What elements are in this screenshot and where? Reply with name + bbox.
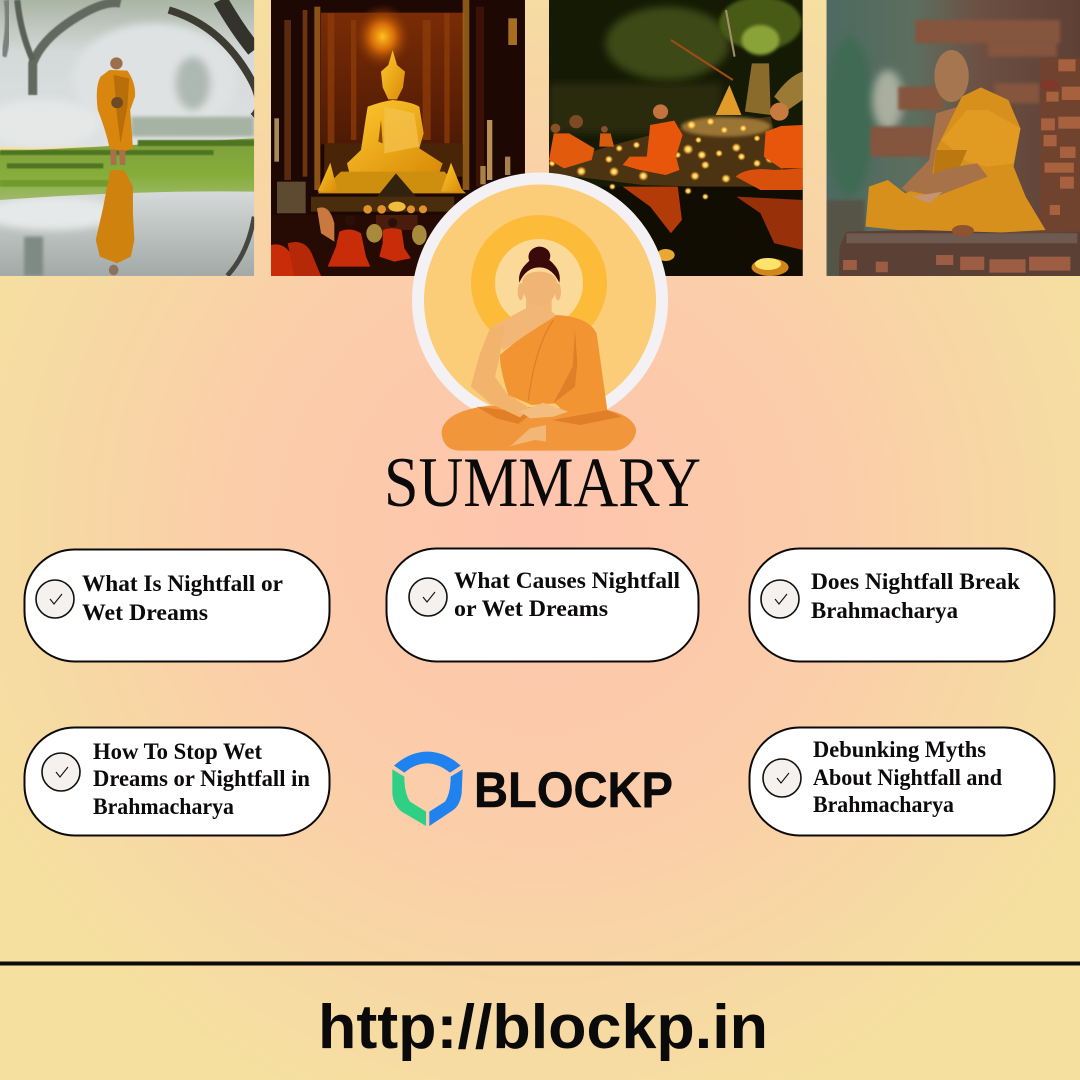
- card text: Wet Dreams: [82, 600, 208, 625]
- tree trunks and branches: [3, 0, 259, 276]
- card text: What Causes Nightfall: [454, 568, 680, 593]
- logo: BLOCKP: [392, 752, 673, 826]
- floating candle: [751, 259, 789, 276]
- footer url: http://blockp.in: [318, 993, 768, 1062]
- brick column: [1040, 58, 1080, 232]
- logo wordmark: BLOCKP: [474, 762, 673, 818]
- logo shield icon: [392, 752, 463, 826]
- card text: Does Nightfall Break: [811, 569, 1020, 594]
- card text: About Nightfall and: [813, 765, 1002, 790]
- card text: Dreams or Nightfall in: [93, 766, 310, 791]
- card: what causes nightfall: [386, 548, 698, 662]
- halo circles: [412, 172, 668, 428]
- tree foliage: [605, 7, 729, 80]
- candlelit ground: [549, 116, 784, 187]
- card: debunking myths: [750, 728, 1054, 836]
- Buddha statue: [318, 50, 466, 193]
- kneeling monks: [271, 228, 411, 276]
- card text: Brahmacharya: [93, 794, 234, 819]
- card text: What Is Nightfall or: [82, 571, 283, 596]
- card text: Brahmacharya: [811, 598, 958, 623]
- head and hair: [518, 247, 561, 306]
- check icon: [36, 580, 74, 618]
- monk and reflection: [110, 57, 123, 69]
- card: does nightfall break brahmacharya: [750, 548, 1054, 662]
- seated figure: [442, 247, 636, 451]
- check icon: [761, 580, 799, 618]
- candle lights: [548, 118, 775, 200]
- seated monks: [623, 121, 683, 175]
- stone platform: [839, 230, 1080, 276]
- summary illustration: meditating figure in halo: [412, 172, 668, 451]
- card text: How To Stop Wet: [93, 739, 262, 764]
- card: what is nightfall: [24, 550, 330, 662]
- check icon: [409, 578, 447, 616]
- photo: monks with candles at night: [548, 0, 803, 276]
- card text: Debunking Myths: [813, 737, 986, 762]
- photo: monk walking in mist: [0, 0, 259, 276]
- card text: Brahmacharya: [813, 792, 954, 817]
- photo: meditating monk on ruins: [826, 0, 1080, 277]
- card: how to stop wet dreams: [24, 728, 330, 836]
- photo: golden Buddha in temple: [271, 0, 525, 276]
- card text: or Wet Dreams: [454, 596, 608, 621]
- monk body: [902, 107, 958, 197]
- check icon: [763, 759, 801, 797]
- title: SUMMARY: [384, 444, 701, 522]
- check icon: [42, 753, 80, 791]
